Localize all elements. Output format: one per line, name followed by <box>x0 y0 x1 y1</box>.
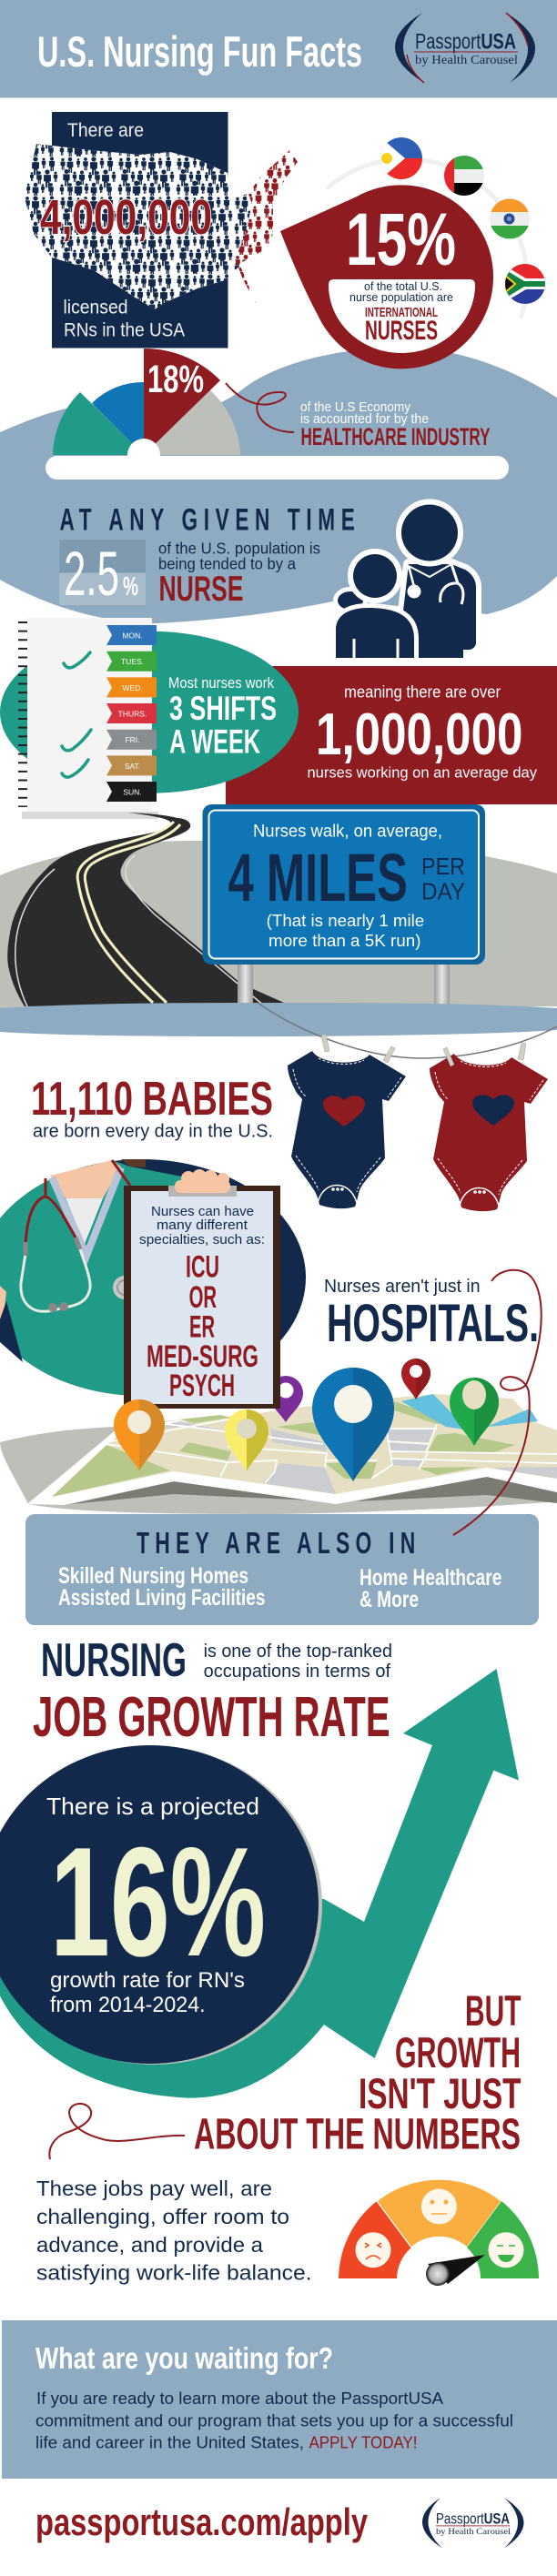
text block: job growth rate: is one of the top-ranked <box>204 1642 392 1662</box>
footer logo: PassportUSA <box>422 2498 524 2548</box>
text: international: INTERNATIONAL <box>365 305 438 320</box>
circle: 16% growth <box>0 1745 322 2065</box>
text: of the total: of the total U.S. <box>364 280 442 293</box>
stat: 2.5%: 2.5 <box>64 539 119 609</box>
logo: PassportUSA <box>395 13 535 83</box>
text: RNs in the USA: RNs in the USA <box>64 320 185 341</box>
pin: purple <box>268 1376 303 1422</box>
ribbon MON <box>106 625 157 645</box>
hand <box>175 1169 230 1193</box>
face: sad <box>355 2232 391 2268</box>
ribbon FRI <box>106 730 157 750</box>
location pins <box>114 1368 499 1481</box>
pin: orange <box>114 1399 165 1470</box>
ribbon TUES: TUES. <box>121 657 144 666</box>
footer logo: PassportUSA: by Health Carousel <box>436 2528 511 2537</box>
check marks <box>62 652 91 777</box>
ribbon FRI: FRI. <box>125 735 140 744</box>
road sign: 4 miles per day: PER <box>421 854 465 880</box>
neck <box>50 1160 121 1198</box>
teal ellipse: 3 shifts a week: A WEEK <box>169 722 260 760</box>
ribbon SAT: SAT. <box>125 762 140 771</box>
scrubs <box>0 1160 182 1401</box>
gray hill <box>0 841 557 1010</box>
clothes line <box>258 1003 557 1058</box>
circle: 16% growth: There is a projected <box>46 1793 259 1820</box>
web address: passportusa.com/apply <box>35 2500 368 2543</box>
text block: 11,110 babies: 11,110 BABIES <box>31 1073 273 1126</box>
illustration: nurse in scrubs <box>0 1159 306 1401</box>
text block: these jobs pay well: advance, and provide a <box>36 2233 263 2257</box>
panel: they are also in: Assisted Living Facilities <box>58 1585 266 1611</box>
white bar <box>46 456 509 480</box>
clipboard: specialties: Nurses can have <box>151 1204 254 1219</box>
ribbon SAT <box>106 755 157 775</box>
face: happy <box>488 2232 524 2268</box>
panel: they are also in: Skilled Nursing Homes <box>58 1563 248 1589</box>
pin: green <box>450 1378 499 1446</box>
circle: 16% growth: growth rate for RN's <box>50 1968 245 1993</box>
squiggle line <box>49 2104 185 2159</box>
text: there are: There are <box>67 120 144 141</box>
text block: tended to by a nurse: NURSE <box>158 570 244 609</box>
text block: job growth rate: NURSING <box>41 1634 187 1687</box>
panel: call to action: APPLY TODAY! <box>309 2433 417 2451</box>
ribbon THURS <box>106 703 157 723</box>
sign posts <box>238 963 450 1005</box>
ribbon SUN <box>106 782 157 802</box>
logo: PassportUSA: by Health Carousel <box>415 53 518 66</box>
panel: call to action: If you are ready to learn more about the PassportUSA <box>36 2389 444 2408</box>
text: licensed: licensed <box>64 298 127 318</box>
clipboard: specialties: specialties, such as: <box>139 1232 265 1248</box>
panel: 1,000,000 nurses <box>226 666 557 804</box>
number 18%: 18% <box>147 358 204 401</box>
text block: 11,110 babies <box>31 1073 273 1142</box>
panel: call to action: What are you waiting for? <box>35 2341 333 2375</box>
clipboard: specialties: PSYCH <box>169 1369 235 1403</box>
icon: clothes pins <box>321 1034 526 1066</box>
text: nurse population: nurse population are <box>349 291 453 304</box>
street map <box>27 1359 557 1505</box>
clipboard: specialties <box>124 1169 280 1409</box>
panel: they are also in <box>25 1514 539 1625</box>
text block: tended to by a nurse <box>158 539 320 609</box>
panel: call to action <box>2 2320 557 2479</box>
arrow: growth <box>0 1669 519 2098</box>
text block: hospitals: Nurses aren't just in <box>324 1277 481 1297</box>
stethoscope <box>21 1160 130 1312</box>
panel: 1,000,000 nurses: meaning there are over <box>344 682 501 701</box>
calendar <box>22 618 158 819</box>
pin: red <box>401 1359 430 1399</box>
road sign: 4 miles per day: more than a 5K run) <box>268 932 420 950</box>
teal ellipse: 3 shifts a week: Most nurses work <box>168 675 275 692</box>
heading: but growth isn't just about the numbers <box>194 1986 522 2159</box>
navy map panel <box>52 112 228 348</box>
text block: these jobs pay well <box>36 2177 312 2284</box>
panel: call to action: life and career in the United States, <box>35 2433 304 2451</box>
road sign: 4 miles per day <box>202 804 485 1005</box>
flag: South Africa <box>505 264 545 304</box>
red curved line to panel <box>453 1270 542 1535</box>
stat: 2.5%: % <box>123 572 138 601</box>
flag: India <box>490 198 530 238</box>
clipboard: specialties: MED-SURG <box>147 1339 258 1374</box>
needle <box>426 2255 485 2286</box>
title: U.S. Nursing Fun Facts <box>37 27 362 76</box>
text: nurses: NURSES <box>365 316 438 346</box>
text block: 11,110 babies: are born every day in the U.S. <box>33 1122 273 1142</box>
road <box>7 813 284 1006</box>
blue band <box>0 1003 557 1036</box>
footer logo: PassportUSA: PassportUSA <box>436 2510 510 2527</box>
teal ellipse: 3 shifts a week: 3 SHIFTS <box>169 690 277 727</box>
pie chart: 18% of economy <box>53 349 240 471</box>
ground under map <box>0 1419 557 1514</box>
ribbon MON: MON. <box>122 631 143 641</box>
light blue hills <box>0 348 557 623</box>
squiggle line <box>226 383 294 432</box>
logo: PassportUSA: PassportUSA <box>415 30 516 55</box>
face: neutral <box>421 2189 457 2224</box>
road sign: 4 miles per day: (That is nearly 1 mile <box>267 912 424 930</box>
heading: but growth isn't just about the numbers: BUT <box>465 1986 522 2035</box>
icon: nurse with child <box>336 504 476 658</box>
text block: these jobs pay well: satisfying work-life balance. <box>36 2260 312 2284</box>
ribbon THURS: THURS. <box>118 710 147 719</box>
clipboard: specialties: OR <box>189 1280 217 1315</box>
text block: healthcare industry <box>300 399 490 450</box>
heading: at any given time: AT ANY GIVEN TIME <box>60 502 360 537</box>
pin: yellow <box>225 1409 268 1471</box>
text block: job growth rate <box>33 1634 392 1749</box>
panel: they are also in: & More <box>360 1587 419 1612</box>
number 16%: 16% <box>50 1815 266 1989</box>
icon: navy onesie <box>288 1051 406 1208</box>
panel: 1,000,000 nurses: nurses working on an average day <box>308 764 537 781</box>
pin: blue <box>312 1368 394 1481</box>
text block: job growth rate: occupations in terms of <box>204 1662 390 1682</box>
map of the USA made of people <box>25 144 298 309</box>
ribbon WED <box>106 677 157 697</box>
text block: these jobs pay well: challenging, offer room to <box>36 2205 289 2228</box>
left arm <box>0 1286 6 1319</box>
text block: healthcare industry: is accounted for by the <box>300 411 429 427</box>
ribbon WED: WED. <box>122 683 143 692</box>
text block: tended to by a nurse: of the U.S. population is <box>158 539 320 557</box>
circle: 16% growth: from 2014-2024. <box>50 1993 206 2017</box>
arc connecting flags <box>327 159 527 318</box>
panel: they are also in: Home Healthcare <box>360 1565 501 1591</box>
teal ellipse: 3 shifts a week <box>0 631 299 793</box>
callout: 15% international nurses <box>280 185 493 369</box>
gauge with faces <box>339 2179 539 2286</box>
text block: these jobs pay well: These jobs pay well, are <box>36 2177 272 2200</box>
icon: red onesie <box>430 1054 548 1211</box>
clipboard: specialties: ICU <box>186 1250 219 1285</box>
road sign: 4 miles per day: Nurses walk, on average, <box>253 823 442 842</box>
number 4,000,000: 4,000,000 <box>40 190 212 245</box>
ribbon TUES <box>106 652 157 672</box>
road sign: 4 miles per day: DAY <box>421 879 465 904</box>
header band <box>0 0 557 98</box>
clipboard: specialties: many different <box>157 1217 248 1233</box>
flag: Philippines <box>380 137 422 179</box>
number 15%: 15% <box>346 198 456 281</box>
road sign: 4 miles per day: 4 MILES <box>228 840 408 915</box>
flag: UAE <box>444 156 484 196</box>
text block: tended to by a nurse: being tended to by a <box>158 555 296 573</box>
map patches <box>52 1401 515 1497</box>
clipboard: specialties: ER <box>189 1310 215 1345</box>
panel: they are also in: THEY ARE ALSO IN <box>137 1526 420 1560</box>
ribbon SUN: SUN. <box>123 788 142 797</box>
panel: call to action: commitment and our program that sets you up for a successful <box>35 2410 513 2430</box>
text block: healthcare industry: of the U.S Economy <box>300 399 410 415</box>
